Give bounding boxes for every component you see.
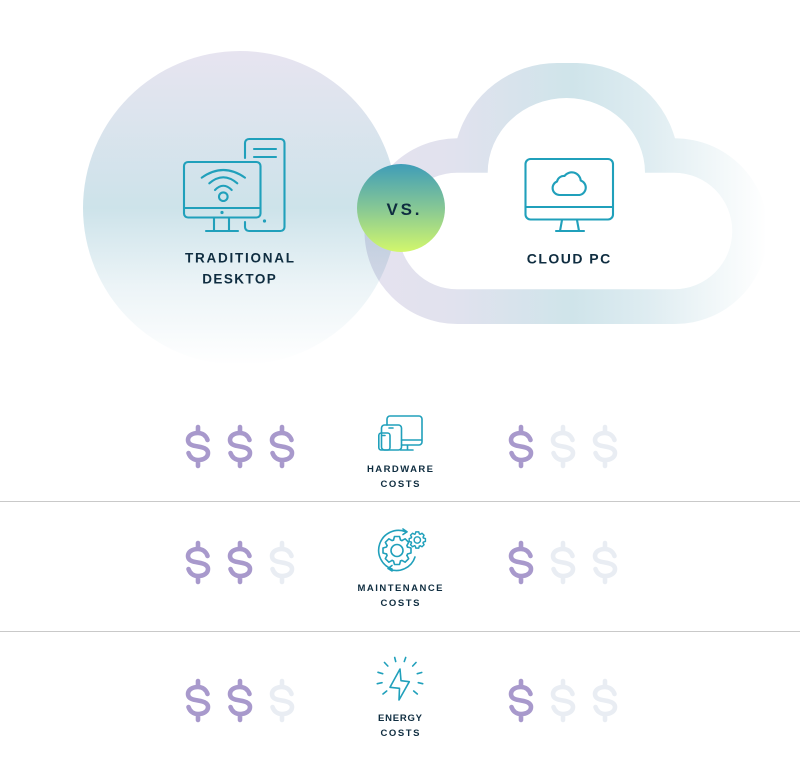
label: energy costs	[378, 713, 423, 739]
cloud rating: one of three	[511, 427, 615, 466]
traditional rating: two of three	[188, 543, 292, 582]
traditional desktop circle	[83, 51, 397, 365]
label: energy costs: ENERGY	[378, 713, 423, 724]
heading: traditional desktop	[185, 250, 294, 286]
cloud rating: one of three	[511, 543, 615, 582]
label: hardware costs	[367, 464, 433, 490]
heading: cloud pc: CLOUD PC	[527, 250, 610, 266]
icon: gears with arrows	[379, 529, 425, 571]
icon: cloud pc monitor	[526, 159, 613, 231]
label: hardware costs: COSTS	[380, 479, 420, 490]
label: maintenance costs: MAINTENANCE	[358, 583, 442, 594]
label: hardware costs: HARDWARE	[367, 464, 433, 475]
label: maintenance costs: COSTS	[380, 598, 420, 609]
traditional rating: two of three	[188, 681, 292, 720]
row: energy costs	[188, 658, 615, 739]
traditional rating: three of three	[188, 427, 292, 466]
icon: desktop and tablet with wifi	[184, 139, 284, 231]
row: maintenance costs	[188, 529, 615, 609]
icon: hardware devices	[379, 416, 422, 450]
row: hardware costs	[188, 416, 615, 490]
vs badge: VS.	[386, 200, 420, 219]
vs badge	[357, 164, 445, 252]
heading: traditional desktop: TRADITIONAL	[185, 250, 294, 265]
heading: traditional desktop: DESKTOP	[202, 271, 276, 286]
cloud rating: one of three	[511, 681, 615, 720]
label: maintenance costs	[358, 583, 442, 609]
label: energy costs: COSTS	[380, 728, 420, 739]
cloud outline	[364, 63, 768, 324]
icon: lightning bolt	[377, 658, 423, 700]
